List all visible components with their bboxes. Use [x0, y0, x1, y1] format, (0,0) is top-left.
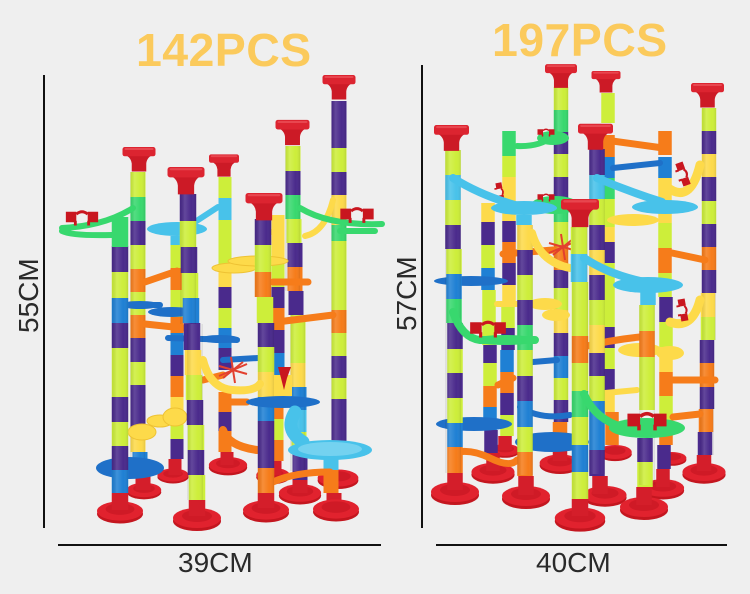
rear tower caps	[545, 64, 724, 107]
rear towers	[175, 177, 278, 475]
green ramp, left	[62, 208, 133, 247]
yellow block with red figure on ramp	[274, 367, 292, 396]
yellow spiral discs	[128, 256, 288, 440]
blue discs	[96, 301, 240, 479]
front centre shading	[572, 227, 588, 499]
front bases	[431, 482, 668, 532]
connector tracks	[453, 136, 715, 464]
light blue slide and disc	[288, 412, 372, 460]
width dimension: 40CM: 40CM	[536, 547, 611, 578]
front towers	[453, 149, 648, 505]
yellow ramp with red wheel	[532, 233, 577, 268]
light blue disc, upper	[147, 222, 207, 236]
front centre cap	[561, 199, 599, 227]
green ramp with figure, right	[584, 394, 685, 438]
front centre tower	[579, 227, 580, 516]
marble run: 197 pieces	[431, 64, 726, 532]
tower shading	[130, 101, 346, 472]
front bases	[97, 499, 359, 531]
front towers	[120, 194, 266, 516]
caps	[434, 124, 613, 151]
light blue ramps and discs, upper	[453, 178, 698, 215]
height dimension: 57CM: 57CM	[391, 256, 422, 331]
yellow ramp with red wheel	[203, 357, 260, 390]
rear tower shading	[554, 87, 716, 455]
title: 142PCS: 142PCS	[136, 24, 312, 76]
width dimension: 39CM: 39CM	[178, 547, 253, 578]
red figures, rear	[494, 129, 691, 322]
light blue ramp, centre	[584, 258, 683, 293]
height dimension: 55CM: 55CM	[13, 258, 44, 333]
green ramp, right	[300, 208, 382, 231]
blue discs	[434, 276, 589, 452]
green and yellow discs	[528, 131, 684, 360]
green ramp with figure, left	[453, 312, 538, 345]
tower caps, front	[168, 167, 282, 220]
front tower shading	[112, 194, 274, 500]
tower caps, rear	[122, 75, 356, 177]
rear bases	[127, 457, 358, 504]
connector tracks	[128, 200, 333, 482]
rear towers	[488, 93, 666, 487]
front tower shading	[445, 149, 655, 485]
title: 197PCS: 197PCS	[492, 14, 668, 66]
marble run: 142 pieces	[62, 75, 382, 531]
rear bases	[471, 444, 726, 507]
blue ring at lower right	[246, 396, 320, 408]
